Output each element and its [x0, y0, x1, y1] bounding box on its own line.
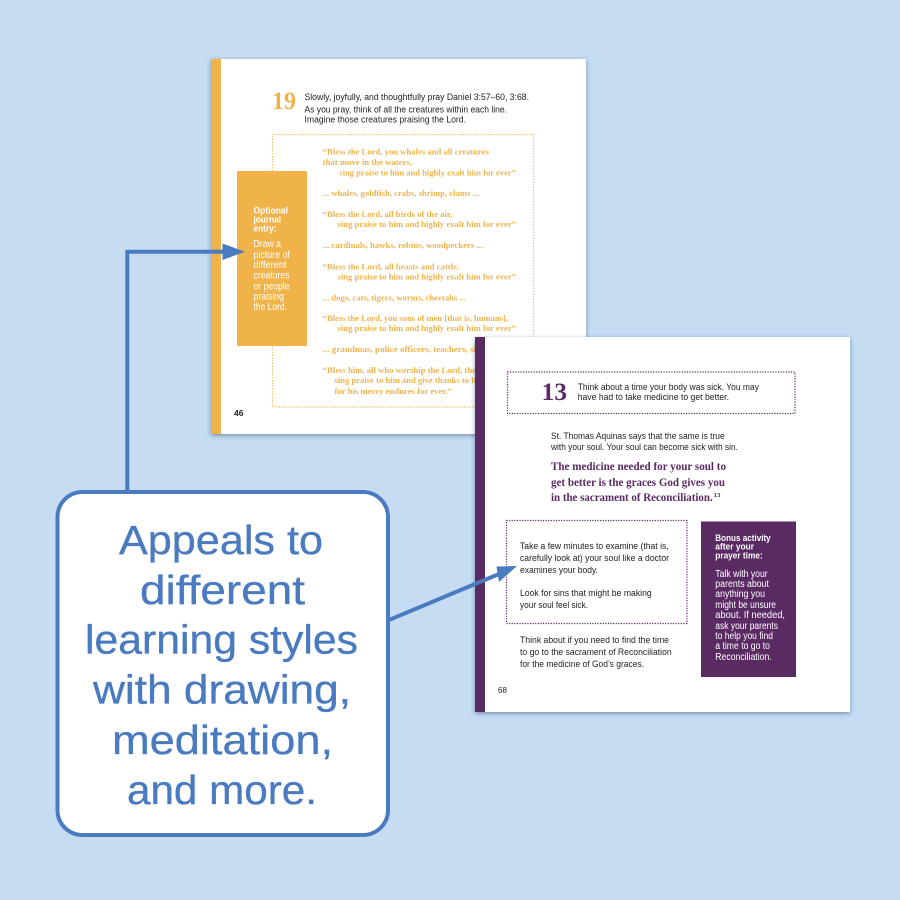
panel: orange book page 46: [211, 59, 586, 434]
examine text: examines your body.: [520, 565, 598, 576]
highlighted medicine statement: [551, 461, 726, 504]
reconciliation paragraph: Think about if you need to find the time: [520, 635, 669, 646]
callout text: meditation,: [112, 717, 333, 763]
purple bonus activity sidebar: [701, 522, 796, 677]
highlighted medicine statement: in the sacrament of Reconciliation.: [551, 492, 713, 504]
examine text: Look for sins that might be making: [520, 588, 652, 599]
orange journal sidebar: the Lord.: [254, 302, 287, 313]
prayer instructions: Slowly, joyfully, and thoughtfully pray Daniel 3:57–60, 3:68.: [304, 92, 529, 103]
purple bonus activity sidebar: might be unsure: [715, 600, 776, 611]
purple bonus activity sidebar: ask your parents: [715, 621, 778, 632]
purple bonus activity sidebar: parents about: [715, 579, 769, 590]
scripture verses: [323, 148, 516, 396]
callout: learning styles: [58, 492, 388, 835]
header instructions: Think about a time your body was sick. You may: [578, 382, 759, 393]
purple bonus activity sidebar: prayer time:: [715, 550, 763, 562]
highlighted medicine statement: The medicine needed for your soul to: [551, 461, 726, 473]
prayer instructions: [304, 92, 529, 126]
page sheet: [211, 59, 586, 434]
orange journal sidebar: [237, 171, 307, 346]
purple bonus activity sidebar: after your: [715, 542, 754, 552]
reconciliation paragraph: for the medicine of God’s graces.: [520, 659, 644, 670]
orange journal sidebar: Draw a: [254, 239, 281, 250]
orange journal sidebar: Optional: [254, 206, 288, 216]
scripture verses: sing praise to him and highly exalt him for ever”: [338, 220, 516, 229]
orange journal sidebar: entry:: [254, 224, 276, 234]
dotted examine frame: [506, 520, 687, 624]
orange journal sidebar: different: [254, 260, 287, 271]
highlighted medicine statement: get better is the graces God gives you: [551, 477, 726, 489]
page number 46: 46: [234, 408, 244, 418]
scripture verses: “Bless the Lord, all beasts and cattle,: [323, 262, 459, 272]
dotted verse frame: [272, 134, 534, 407]
scripture verses: sing praise to him and highly exalt him for ever”: [338, 324, 516, 333]
scripture verses: ... dogs, cats, tigers, worms, cheetahs ...: [323, 294, 466, 302]
header instructions: have had to take medicine to get better.: [578, 392, 729, 403]
scripture verses: sing praise to him and give thanks to h: [334, 376, 476, 385]
purple bonus activity sidebar: Reconciliation.: [715, 652, 772, 663]
scripture verses: ... whales, goldfish, crabs, shrimp, clams ...: [323, 189, 479, 198]
callout text: with drawing,: [92, 666, 351, 712]
prayer instructions: As you pray, think of all the creatures within each line.: [304, 104, 507, 116]
scripture verses: “Bless the Lord, you sons of men [that is, humans],: [323, 314, 508, 323]
purple bonus activity sidebar: anything you: [715, 589, 765, 600]
page sheet: [475, 337, 850, 712]
callout text: and more.: [127, 767, 317, 813]
highlighted medicine statement: 13: [714, 493, 720, 499]
callout text: [85, 517, 358, 813]
scripture verses: “Bless the Lord, all birds of the air,: [323, 210, 452, 219]
examine text: [520, 541, 670, 611]
dotted header frame: [508, 372, 795, 414]
orange spine stripe: [211, 59, 221, 434]
step number 13: 13: [542, 379, 567, 406]
purple bonus activity sidebar: a time to go to: [715, 641, 770, 652]
Aquinas paragraph: St. Thomas Aquinas says that the same is true: [551, 431, 725, 442]
orange journal sidebar: picture of: [254, 250, 290, 261]
prayer instructions: Imagine those creatures praising the Lord.: [304, 114, 466, 126]
callout text: learning styles: [85, 616, 358, 662]
purple spine stripe: [475, 337, 485, 712]
purple bonus activity sidebar: about. If needed,: [715, 610, 785, 621]
page number 68: 68: [498, 685, 507, 695]
orange journal sidebar: creatures: [254, 270, 290, 282]
arrow: callout to examine box: [387, 566, 517, 621]
purple bonus activity sidebar: Bonus activity: [715, 533, 771, 544]
scripture verses: that move in the waters,: [323, 158, 412, 167]
orange journal sidebar: journal: [253, 214, 281, 226]
panel: purple book page 68: [475, 337, 850, 712]
scripture verses: for his mercy endures for ever.”: [334, 387, 452, 396]
callout box: [58, 492, 388, 835]
purple bonus activity sidebar: to help you find: [715, 631, 773, 642]
orange journal sidebar: praising: [254, 292, 284, 302]
step number 19: 19: [272, 88, 296, 115]
scripture verses: “Bless him, all who worship the Lord, the: [323, 366, 476, 375]
scripture verses: sing praise to him and highly exalt him for ever”: [339, 168, 516, 178]
examine text: Take a few minutes to examine (that is,: [520, 541, 669, 552]
scripture verses: sing praise to him and highly exalt him for ever”: [338, 272, 516, 282]
Aquinas paragraph: [550, 431, 738, 453]
callout text: Appeals to: [119, 517, 323, 563]
examine text: carefully look at) your soul like a doctor: [520, 553, 670, 564]
purple bonus activity sidebar: Talk with your: [715, 569, 768, 580]
scripture verses: ... grandmas, police officers, teachers, sl: [323, 345, 477, 354]
orange journal sidebar: or people: [254, 282, 290, 292]
callout text: different: [140, 567, 306, 613]
header instructions: [578, 382, 759, 403]
Aquinas paragraph: with your soul. Your soul can become sick with sin.: [550, 442, 738, 453]
reconciliation paragraph: [520, 635, 672, 670]
examine text: your soul feel sick.: [520, 600, 588, 611]
scripture verses: ... cardinals, hawks, robins, woodpeckers ...: [323, 241, 483, 250]
reconciliation paragraph: to go to the sacrament of Reconciliation: [520, 647, 672, 658]
arrow: callout to journal sidebar: [127, 244, 245, 494]
scripture verses: “Bless the Lord, you whales and all creatures: [323, 148, 490, 156]
